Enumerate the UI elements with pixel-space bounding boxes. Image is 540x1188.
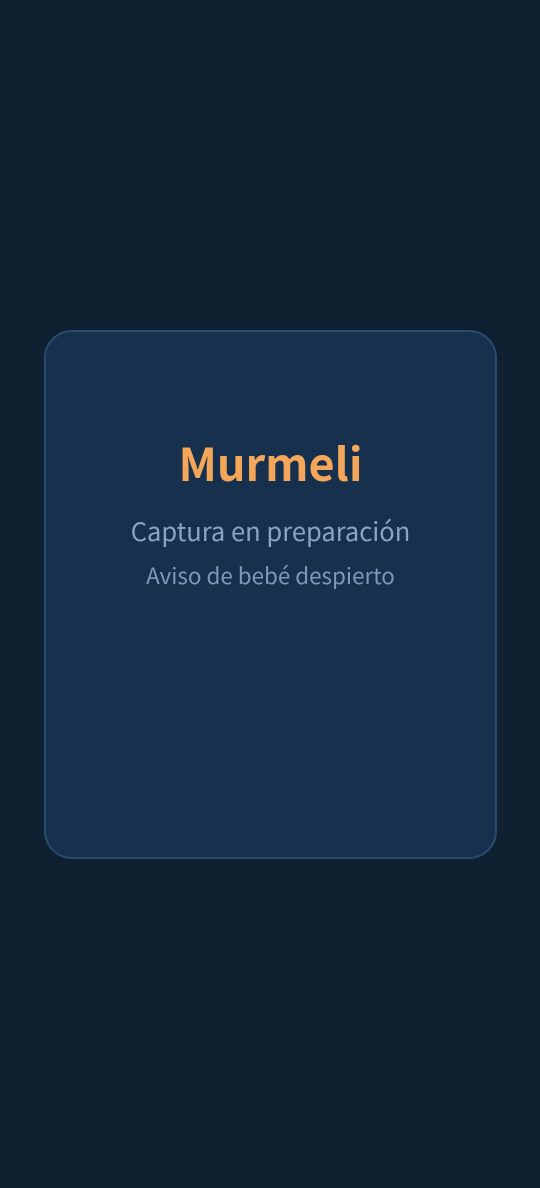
- text: capture status: Captura en preparación: [131, 512, 410, 549]
- panel: placeholder card: [44, 330, 497, 859]
- title: Murmeli: Murmeli: [178, 429, 363, 494]
- text: subtitle: Aviso de bebé despierto: [146, 559, 395, 591]
